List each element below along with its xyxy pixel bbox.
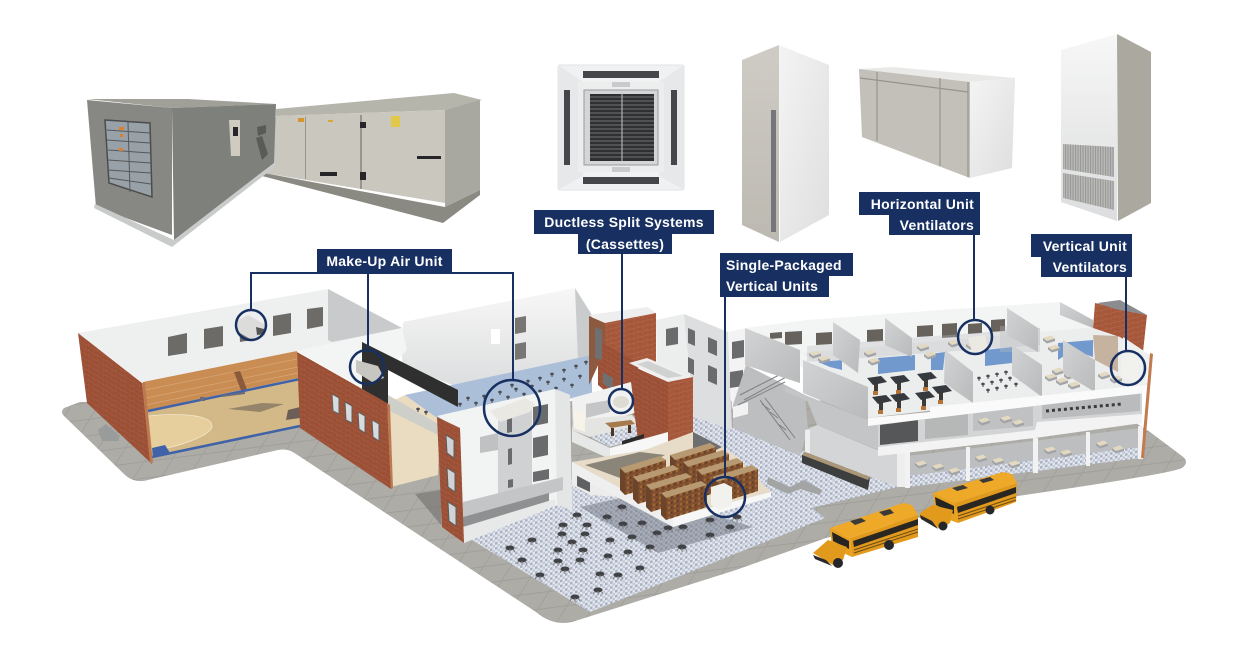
under platform [572,452,660,500]
side column [555,389,572,510]
orange side strip [1141,353,1153,458]
callout: horizontal unit ventilators: Horizontal Unit [871,196,974,212]
room furniture [574,410,644,445]
second slab [878,414,1142,456]
plaza stools [505,504,742,602]
rear brick towers and back building [589,307,748,430]
central white wall block [437,389,572,543]
upper floor back wall [746,302,1093,370]
brick side wall [598,340,640,420]
exterior vent [98,424,120,441]
door details [229,120,240,156]
first unit top [87,99,276,108]
hall wall windows [515,316,526,360]
plaza checked floor [467,415,905,612]
unit in classroom [968,335,988,352]
horizontal unit ventilator photo [859,67,1015,178]
main hall back wall [402,288,578,388]
gym left brick wall [78,333,152,464]
unit in main hall [490,398,535,422]
right brick tower [1093,303,1147,352]
first unit left [87,100,172,235]
back building windows [666,327,744,388]
hall seats [416,361,588,415]
second unit top [276,93,482,116]
gym inner walls [78,289,402,383]
central brick tower and library [572,358,771,527]
second unit front [264,110,445,203]
slots [564,71,677,184]
stair atrium [733,365,808,456]
vertical unit ventilator photo [1061,34,1151,221]
pavement walkway [62,400,1186,623]
blue seating floor [405,355,592,420]
louver [105,120,152,197]
side vent strip [771,110,776,232]
wall bands [463,477,563,517]
callout: ductless split systems [534,210,714,413]
dark beam [362,342,458,415]
library shelves [620,443,758,520]
tall brick tower [629,358,693,457]
unit in library [711,483,732,510]
gray service column [498,407,532,503]
main hall and wing wall [297,288,592,525]
gym wood wall [143,351,298,410]
grille [584,90,658,165]
gym basketball court [147,378,300,458]
back dividers [833,302,1093,373]
middle floor [878,393,1142,447]
unit in cassette room [613,396,629,408]
unit stickers and handles [391,116,400,127]
lower floor [905,426,1143,488]
front bus [813,503,918,568]
callout: make-up air unit: Make-Up Air Unit [326,253,443,269]
callout: vertical unit ventilators: Ventilators [1053,259,1127,275]
upper platform faces [572,430,610,459]
callout: ductless split systems: Ductless Split Systems [544,214,704,230]
classroom block [745,300,1153,495]
callout: make-up air unit [236,249,540,436]
hall floor [388,395,440,487]
rear tower rim [589,307,656,323]
callout: single-packaged vertical units [705,253,853,517]
units shown in the building [238,315,1138,510]
first unit right [172,104,276,240]
base flange [94,163,276,247]
callout: single-packaged vertical units: Vertical Units [726,278,818,294]
gymnasium [78,289,402,464]
callout: vertical unit ventilators [1031,234,1145,385]
callout: horizontal unit ventilators: Ventilators [900,217,974,233]
wing windows [332,394,379,441]
column windows [507,404,549,488]
upper panel left [745,328,800,383]
grilles [1063,144,1114,177]
seated rows [977,371,1022,393]
brick pillar [437,417,464,543]
callout: horizontal unit ventilators [859,192,992,354]
blue partition panels [818,340,1093,374]
unit on side wall [1122,352,1138,382]
glass partitions [807,328,1040,362]
upper slab [868,385,1145,426]
staircases [738,372,795,440]
make-up air unit photo [87,93,482,247]
lower lobby [805,425,908,487]
cassette unit photo [558,65,684,190]
brick wing wall [297,352,391,489]
upper floor surface [803,325,1148,418]
callout: ductless split systems: (Cassettes) [586,236,664,252]
second unit base [262,173,480,223]
unit on wing wall [356,360,384,382]
rear bus [920,472,1017,530]
equipment pads [767,477,822,495]
back building walls [656,314,694,417]
gym windows [168,307,323,356]
upper room floor [590,425,657,447]
upper classroom windows [770,319,1005,345]
shadow under library [580,493,753,553]
lab tables [867,372,952,414]
front dividers [803,337,1150,420]
lower library platform [572,432,771,517]
pavement shadow [415,490,441,525]
white top of wing wall [297,328,407,403]
pillar windows [446,435,456,526]
second unit end [445,100,480,207]
atrium underside [785,387,878,450]
school buses [813,472,1017,568]
single-packaged vertical unit photo [742,45,829,242]
unit in gym [238,315,266,340]
long bench [802,452,870,490]
callout: vertical unit ventilators: Vertical Unit [1043,238,1127,254]
classroom desks [809,336,1122,390]
upper room wall [572,382,635,430]
callout: single-packaged vertical units: Single-Packaged [726,257,842,273]
